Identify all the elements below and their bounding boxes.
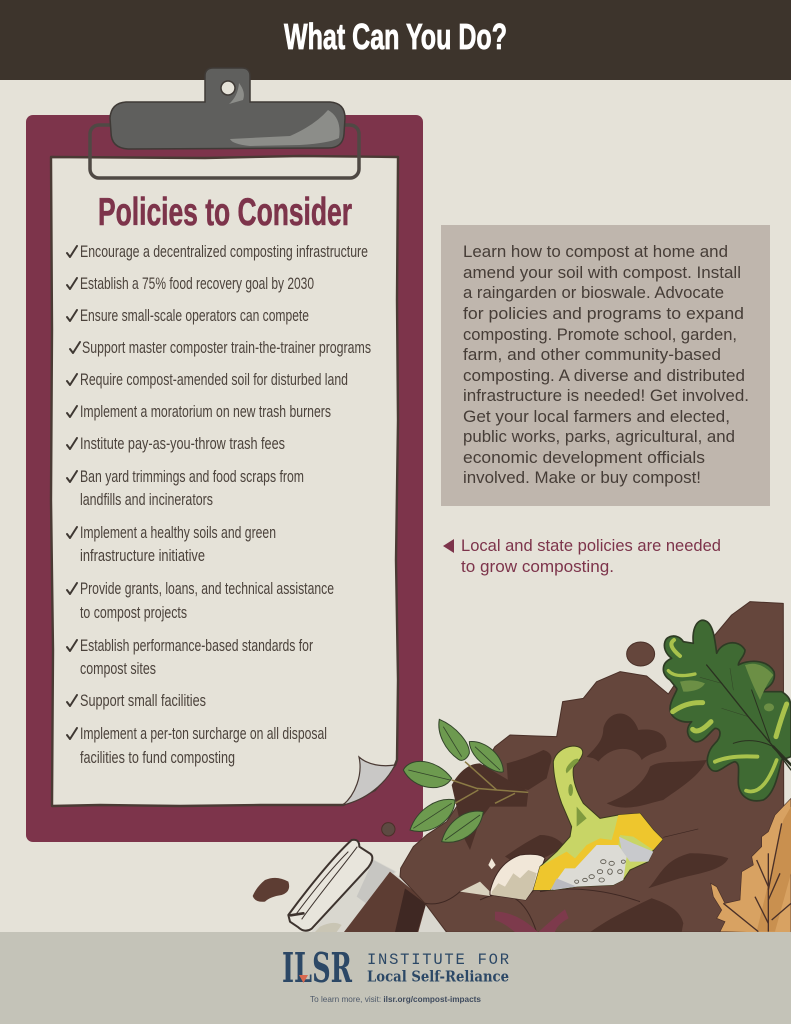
logo (282, 944, 509, 992)
soil clumps (627, 642, 655, 666)
policy checklist: compost sites (80, 660, 156, 678)
footer band (0, 932, 791, 1024)
policy checklist: Require compost-amended soil for disturbed land (80, 371, 348, 389)
panel: what you can do text: amend your soil with compost. Install (463, 264, 741, 282)
logo: INSTITUTE FOR (367, 951, 509, 969)
panel: what you can do text: composting. Promote school, garden, (463, 326, 737, 344)
callout: Local and state policies are needed (461, 537, 721, 555)
illustration: compost cup (253, 840, 447, 932)
dry leaf (711, 798, 791, 933)
policy checklist: Provide grants, loans, and technical assistance (80, 580, 334, 598)
cup sleeve (344, 872, 427, 932)
policy checklist: Ensure small-scale operators can compete (80, 307, 309, 325)
squash seeds (575, 860, 625, 883)
background gap behind leaf (784, 803, 791, 890)
policy checklist: Implement a moratorium on new trash burners (80, 403, 331, 421)
soil clump (253, 878, 289, 902)
clip wire (90, 125, 359, 178)
paper sheet (51, 156, 398, 806)
illustration: compost pile (382, 602, 791, 932)
page curl (343, 757, 395, 805)
leaf veins (700, 665, 791, 770)
oak leaf (663, 620, 791, 801)
soil shadows (452, 714, 728, 932)
footer link: To learn more, visit: ilsr.org/compost-impacts (310, 994, 481, 1004)
panel: clipboard with policies (26, 68, 423, 842)
panel: what you can do text: economic development officials (463, 449, 705, 467)
header band (0, 0, 791, 80)
policy checklist (67, 243, 371, 767)
cup body (312, 858, 397, 932)
squash (533, 746, 663, 890)
panel: what you can do text: farm, and other community-based (463, 346, 721, 364)
check marks (67, 246, 80, 739)
arrow (443, 539, 454, 553)
policy checklist: Support master composter train-the-trainer programs (82, 339, 371, 357)
panel: what you can do text: infrastructure is needed! Get involved. (463, 387, 749, 405)
leaf patches (745, 664, 773, 700)
cup lid (288, 840, 372, 931)
paper clip (90, 68, 359, 178)
policy checklist: infrastructure initiative (80, 547, 205, 565)
policy checklist: facilities to fund composting (80, 749, 235, 767)
panel: what you can do text: composting. A diverse and distributed (463, 367, 745, 385)
panel: what you can do text: involved. Make or buy compost! (463, 469, 701, 487)
callout (443, 537, 721, 576)
policy checklist: to compost projects (80, 604, 187, 622)
soil mound (400, 602, 784, 932)
squash neck marks (566, 759, 587, 827)
policy checklist: Institute pay-as-you-throw trash fees (80, 435, 285, 453)
policy checklist: Establish performance-based standards for (80, 637, 313, 655)
leaf highlights (668, 640, 787, 791)
panel: what you can do text: public works, parks, agricultural, and (463, 428, 735, 446)
logo: ILSR (282, 944, 353, 992)
panel: what you can do text: for policies and programs to expand (463, 305, 744, 323)
policy checklist: Implement a per-ton surcharge on all disposal (80, 725, 327, 743)
policy checklist: landfills and incinerators (80, 491, 213, 509)
small leaves sprig (403, 719, 528, 842)
beet stems (495, 909, 569, 932)
eggshell (460, 854, 545, 900)
callout: to grow composting. (461, 558, 614, 576)
clip hole (221, 81, 235, 95)
clip highlight (230, 110, 340, 146)
panel: what you can do text: Get your local farmers and elected, (463, 408, 730, 426)
policy checklist: Implement a healthy soils and green (80, 524, 276, 542)
policy checklist: Establish a 75% food recovery goal by 2030 (80, 275, 314, 293)
panel: what you can do text: a raingarden or bioswale. Advocate (463, 284, 724, 302)
logo: Local Self-Reliance (367, 968, 509, 986)
policy checklist: Support small facilities (80, 692, 206, 710)
panel: what you can do text: Learn how to compost at home and (463, 243, 728, 261)
heading: Policies to Consider (98, 191, 352, 234)
clip body (110, 68, 345, 149)
policy checklist: Ban yard trimmings and food scraps from (80, 468, 304, 486)
title: What Can You Do? (284, 16, 507, 57)
policy checklist: Encourage a decentralized composting infrastructure (80, 243, 368, 261)
clipboard board (26, 115, 423, 842)
panel: what you can do text (441, 225, 770, 506)
